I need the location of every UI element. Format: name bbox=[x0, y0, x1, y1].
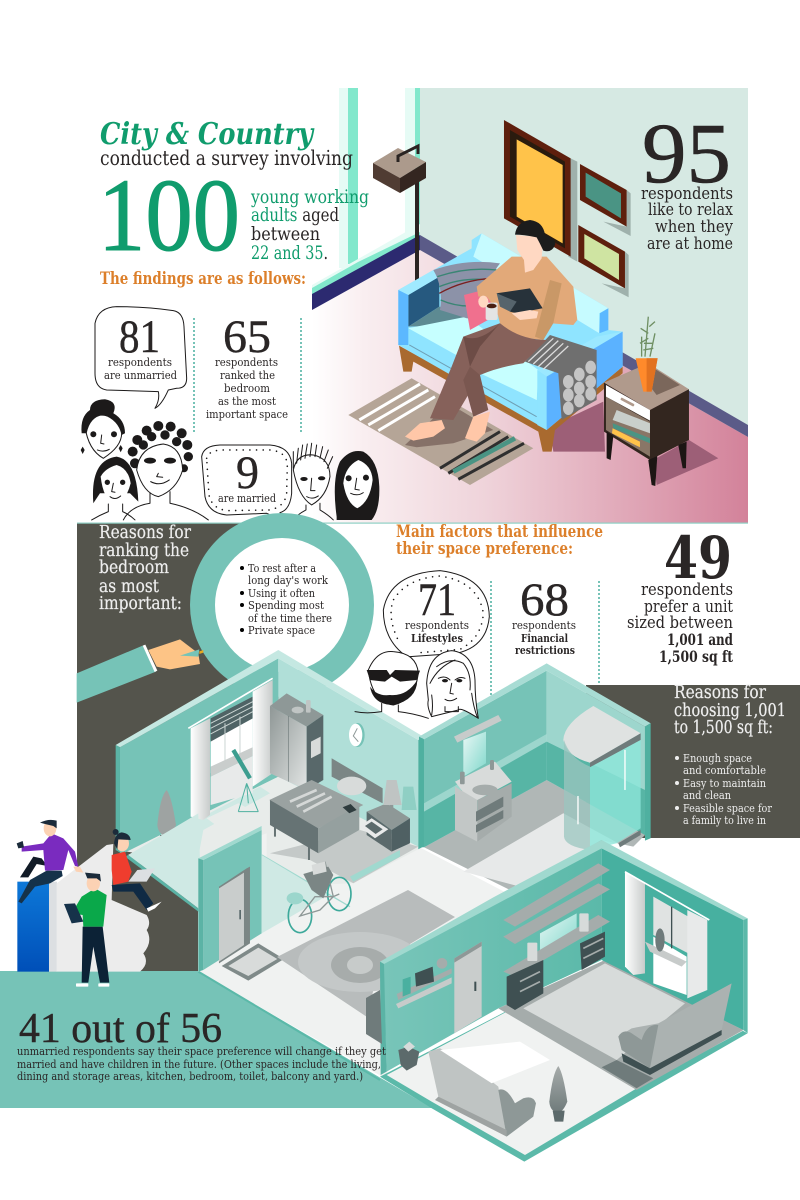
text: unmarried respondents note: married and have children in the future. (Other spaces include the living, bbox=[17, 1058, 381, 1071]
list: choosing bullets: and comfortable bbox=[683, 763, 766, 777]
stat: 81 respondents: respondents bbox=[108, 355, 172, 369]
wardrobe bbox=[270, 693, 323, 790]
bed bbox=[269, 758, 383, 860]
nightstand and lamp bbox=[343, 780, 417, 852]
bathroom bbox=[419, 663, 651, 893]
heading: City & Country: City & Country bbox=[100, 117, 315, 152]
heading: reasons for choosing: to 1,500 sq ft: bbox=[674, 718, 773, 738]
text: young working adults bbox=[250, 186, 369, 264]
illustration: house cutaway bbox=[116, 650, 748, 1162]
wall bbox=[418, 88, 748, 438]
heading: reasons for ranking bbox=[99, 523, 192, 614]
heading: main factors: their space preference: bbox=[396, 539, 573, 558]
stat: 71 lifestyles bbox=[405, 574, 469, 645]
hall cabinet bbox=[366, 990, 382, 1044]
cloud seat bbox=[17, 844, 149, 972]
list: reasons bullets: Spending most bbox=[248, 598, 324, 612]
stat: 49 unit size: 1,500 sq ft bbox=[659, 647, 734, 666]
throw blanket bbox=[525, 335, 597, 420]
sofa right bbox=[618, 983, 732, 1075]
hallway wall and door bbox=[125, 813, 400, 1080]
house floor base bbox=[128, 770, 602, 1080]
stat: 81 respondents: 81 bbox=[119, 311, 160, 363]
heading: main factors bbox=[396, 522, 603, 558]
doodle man spiky hair bbox=[293, 443, 333, 520]
shower bbox=[563, 706, 641, 850]
list: reasons bullets: Private space bbox=[248, 623, 315, 637]
panel: dark background left bbox=[77, 523, 282, 972]
text: young working adults: 22 and 35. bbox=[251, 242, 328, 264]
heading: reasons for ranking: important: bbox=[99, 594, 182, 614]
side table bbox=[604, 317, 718, 486]
text: young working adults: adults aged bbox=[251, 204, 339, 226]
list: reasons bullets: of the time there bbox=[248, 611, 332, 625]
floor vase bbox=[157, 790, 176, 847]
list: reasons bullets bbox=[240, 561, 332, 637]
room door bbox=[454, 942, 482, 1033]
text: survey intro: conducted a survey involving bbox=[100, 146, 353, 170]
stat: 95 relax: like to relax bbox=[648, 200, 733, 220]
stat: 68 financial: 68 bbox=[520, 574, 569, 626]
dotted dividers bbox=[194, 318, 599, 695]
bicycle bbox=[287, 862, 351, 933]
text: young working adults: young working bbox=[250, 186, 369, 208]
heading: findings: The findings are as follows: bbox=[100, 269, 306, 289]
heading: reasons for choosing bbox=[674, 683, 786, 738]
rug bbox=[348, 378, 533, 485]
window bbox=[312, 88, 420, 298]
speech bubble 81 bbox=[95, 307, 187, 408]
stat: 95 relax: when they bbox=[655, 217, 733, 237]
stat: 71 lifestyles: respondents bbox=[405, 618, 469, 632]
list: reasons bullets: Using it often bbox=[248, 586, 315, 600]
window and curtains bbox=[625, 872, 709, 998]
stat: 95 relax: are at home bbox=[647, 234, 733, 254]
stat: 68 financial: restrictions bbox=[515, 644, 575, 657]
text: unmarried respondents note: dining and storage areas, kitchen, bedroom, toilet, balcony and yard.) bbox=[17, 1070, 363, 1083]
sofa bbox=[398, 233, 623, 452]
text: young working adults: between bbox=[251, 223, 320, 245]
thought bubble bbox=[383, 571, 489, 662]
doodle bearded man bbox=[355, 652, 428, 718]
bin bbox=[398, 1042, 419, 1071]
list: reasons bullets: long day's work bbox=[248, 573, 329, 587]
stat: 9 are married bbox=[218, 447, 277, 505]
doodle woman long hair bbox=[427, 651, 478, 718]
shelving and desk bbox=[503, 863, 610, 1010]
stat: 65 respondents: important space bbox=[206, 407, 288, 421]
heading: reasons for ranking: as most bbox=[99, 577, 159, 597]
wall frames bbox=[504, 120, 631, 297]
hall carpet bbox=[277, 890, 455, 1017]
stat: 9 are married: are married bbox=[218, 491, 277, 505]
stat: 95 relax bbox=[641, 105, 733, 254]
wall shelf with books bbox=[396, 958, 452, 1008]
pillows bbox=[433, 262, 507, 330]
heading: reasons for ranking: ranking the bbox=[99, 541, 189, 561]
stat: 95 relax: respondents bbox=[641, 184, 733, 204]
text: unmarried respondents note: unmarried respondents say their space preference will change if they get bbox=[17, 1045, 387, 1058]
doodle woman with curls bbox=[123, 421, 208, 520]
stat: 49 unit size: respondents bbox=[641, 580, 733, 600]
panel: teal band bottom bbox=[0, 971, 432, 1108]
speech bubble 9 bbox=[202, 445, 292, 521]
floor bbox=[312, 250, 748, 523]
floor lamp bbox=[373, 146, 426, 282]
doodle woman with bob bbox=[92, 457, 138, 520]
baseboard navy bbox=[312, 235, 420, 310]
stat: 68 financial: respondents bbox=[512, 618, 576, 632]
stat: 65 respondents: 65 bbox=[223, 311, 271, 363]
panel: living room scene bbox=[312, 88, 748, 523]
illustration: young people bbox=[17, 820, 162, 987]
doodle woman long hair bbox=[335, 451, 379, 520]
living room bbox=[380, 840, 748, 1162]
stat: 41 out of 56: 41 out of 56 bbox=[19, 1006, 222, 1052]
stat: 49 unit size: prefer a unit bbox=[644, 597, 733, 617]
vase bbox=[549, 1066, 567, 1122]
woman reading bbox=[405, 220, 577, 442]
doodle woman with bun bbox=[81, 399, 125, 458]
panel: dark background right bbox=[586, 685, 800, 838]
wall clock bbox=[349, 723, 365, 747]
mirror and shelf bbox=[454, 715, 502, 777]
stat: 71 lifestyles: Lifestyles bbox=[411, 632, 463, 645]
person red top bbox=[112, 829, 162, 912]
stat: 65 respondents bbox=[206, 311, 288, 421]
list: choosing bullets: Easy to maintain bbox=[683, 776, 766, 790]
heading: reasons for choosing: Reasons for bbox=[674, 683, 767, 703]
list: choosing bullets: and clean bbox=[683, 788, 732, 802]
doodle: bubble 71 and couple bbox=[355, 571, 489, 718]
number: 100: 100 bbox=[98, 158, 240, 273]
doodle: speech bubble and women bbox=[81, 307, 379, 521]
stat: 49 unit size bbox=[627, 524, 734, 666]
divider line bbox=[77, 522, 748, 524]
list: choosing bullets: Enough space bbox=[683, 751, 752, 765]
heading: reasons for ranking: Reasons for bbox=[99, 523, 192, 543]
telescope bbox=[233, 750, 258, 812]
person purple hoodie bbox=[17, 820, 83, 903]
stat: 65 respondents: bedroom bbox=[224, 381, 270, 395]
stat: 49 unit size: 1,001 and bbox=[667, 630, 733, 649]
stat: 65 respondents: respondents bbox=[215, 355, 278, 369]
stat: 68 financial bbox=[512, 574, 576, 657]
text: unmarried respondents note bbox=[17, 1045, 387, 1083]
list: reasons bullets: To rest after a bbox=[248, 561, 316, 575]
icon: hand with pen bbox=[77, 639, 203, 703]
heading: main factors: Main factors that influence bbox=[396, 522, 603, 541]
bedroom window bbox=[188, 678, 273, 820]
list: choosing bullets bbox=[675, 751, 772, 827]
stat: 95 relax: 95 bbox=[642, 105, 731, 201]
baseboard right bbox=[420, 235, 748, 437]
person green top bbox=[64, 873, 109, 987]
heading: reasons for ranking: bedroom bbox=[99, 558, 169, 578]
list: choosing bullets: a family to live in bbox=[683, 813, 766, 827]
stat: 81 respondents: are unmarried bbox=[104, 368, 178, 382]
sofa left bbox=[428, 1042, 550, 1137]
stat: 9 are married: 9 bbox=[236, 447, 259, 499]
stat: 49 unit size: 49 bbox=[664, 524, 732, 592]
circle with reasons bbox=[190, 513, 374, 697]
bedroom bbox=[116, 650, 423, 887]
list: choosing bullets: Feasible space for bbox=[683, 801, 772, 815]
stat: 65 respondents: as the most bbox=[218, 394, 276, 408]
stat: 71 lifestyles: 71 bbox=[418, 574, 456, 626]
stat: 81 respondents bbox=[104, 311, 178, 382]
stat: 65 respondents: ranked the bbox=[220, 368, 275, 382]
stat: 68 financial: Financial bbox=[521, 632, 568, 645]
stat: 49 unit size: sized between bbox=[627, 613, 733, 633]
vanity cabinet bbox=[455, 760, 512, 842]
